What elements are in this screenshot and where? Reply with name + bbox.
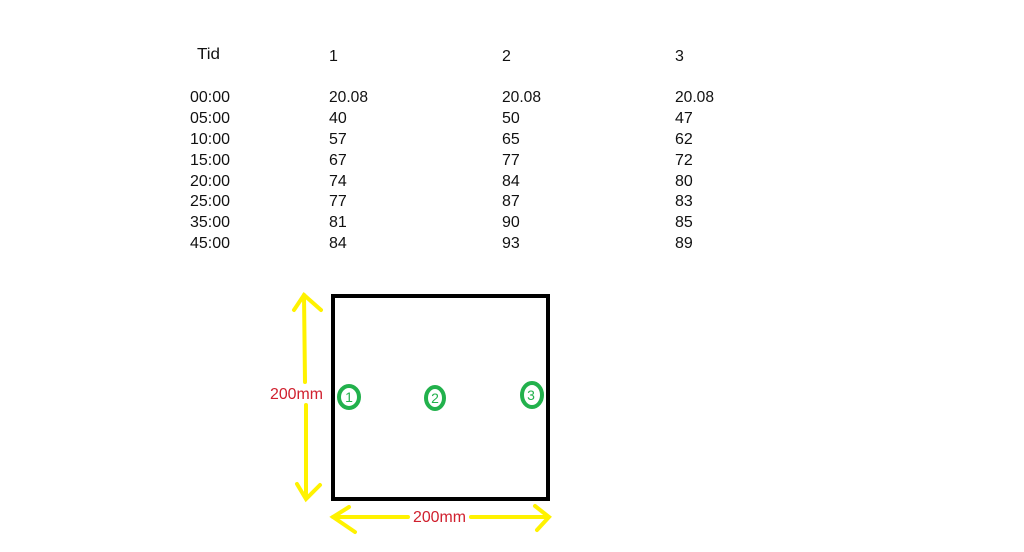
marker: point 1: 1: [345, 389, 353, 405]
column: time: 25:00: [190, 193, 230, 210]
column: point 1 values: 84: [329, 235, 347, 252]
table header row: Tid: [197, 46, 220, 63]
arrow: vertical 200mm dimension: [294, 295, 321, 499]
table header row: [197, 46, 684, 65]
column: point 1 values: 57: [329, 131, 347, 148]
arrow: horizontal 200mm dimension: [333, 506, 549, 532]
column: time: 00:00: [190, 89, 230, 106]
square outline: [333, 296, 548, 499]
column: point 2 values: 50: [502, 110, 520, 127]
column: point 1 values: 67: [329, 152, 347, 169]
column: point 3 values: 72: [675, 152, 693, 169]
column: point 1 values: 77: [329, 193, 347, 210]
column: point 3 values: 80: [675, 173, 693, 190]
marker: point 3: [522, 383, 542, 407]
table header row: 1: [329, 48, 338, 65]
label: vertical 200mm: 200mm: [270, 386, 323, 403]
marker: point 3: 3: [527, 387, 535, 403]
marker: point 1: [339, 386, 359, 408]
panel: time and measurement table: [190, 46, 714, 252]
column: point 2 values: [502, 89, 541, 252]
column: point 3 values: 47: [675, 110, 693, 127]
column: point 2 values: 65: [502, 131, 520, 148]
column: point 1 values: 74: [329, 173, 347, 190]
column: point 1 values: 20.08: [329, 89, 368, 106]
column: time: 05:00: [190, 110, 230, 127]
panel: square diagram: [270, 295, 549, 532]
marker: point 2: [426, 387, 444, 409]
column: point 2 values: 77: [502, 152, 520, 169]
column: point 2 values: 87: [502, 193, 520, 210]
column: point 2 values: 90: [502, 214, 520, 231]
column: point 3 values: 62: [675, 131, 693, 148]
table header row: 3: [675, 48, 684, 65]
column: time: 15:00: [190, 152, 230, 169]
column: time: 20:00: [190, 173, 230, 190]
column: point 2 values: 84: [502, 173, 520, 190]
marker: point 2: 2: [431, 390, 439, 406]
column: time: 45:00: [190, 235, 230, 252]
column: point 1 values: 40: [329, 110, 347, 127]
column: point 2 values: 20.08: [502, 89, 541, 106]
column: point 3 values: [675, 89, 714, 252]
column: time: 10:00: [190, 131, 230, 148]
column: point 3 values: 83: [675, 193, 693, 210]
column: time: 35:00: [190, 214, 230, 231]
column: time: [190, 89, 230, 252]
column: point 1 values: [329, 89, 368, 252]
table header row: 2: [502, 48, 511, 65]
label: horizontal 200mm: 200mm: [413, 509, 466, 526]
column: point 3 values: 20.08: [675, 89, 714, 106]
column: point 3 values: 85: [675, 214, 693, 231]
column: point 1 values: 81: [329, 214, 347, 231]
column: point 2 values: 93: [502, 235, 520, 252]
column: point 3 values: 89: [675, 235, 693, 252]
